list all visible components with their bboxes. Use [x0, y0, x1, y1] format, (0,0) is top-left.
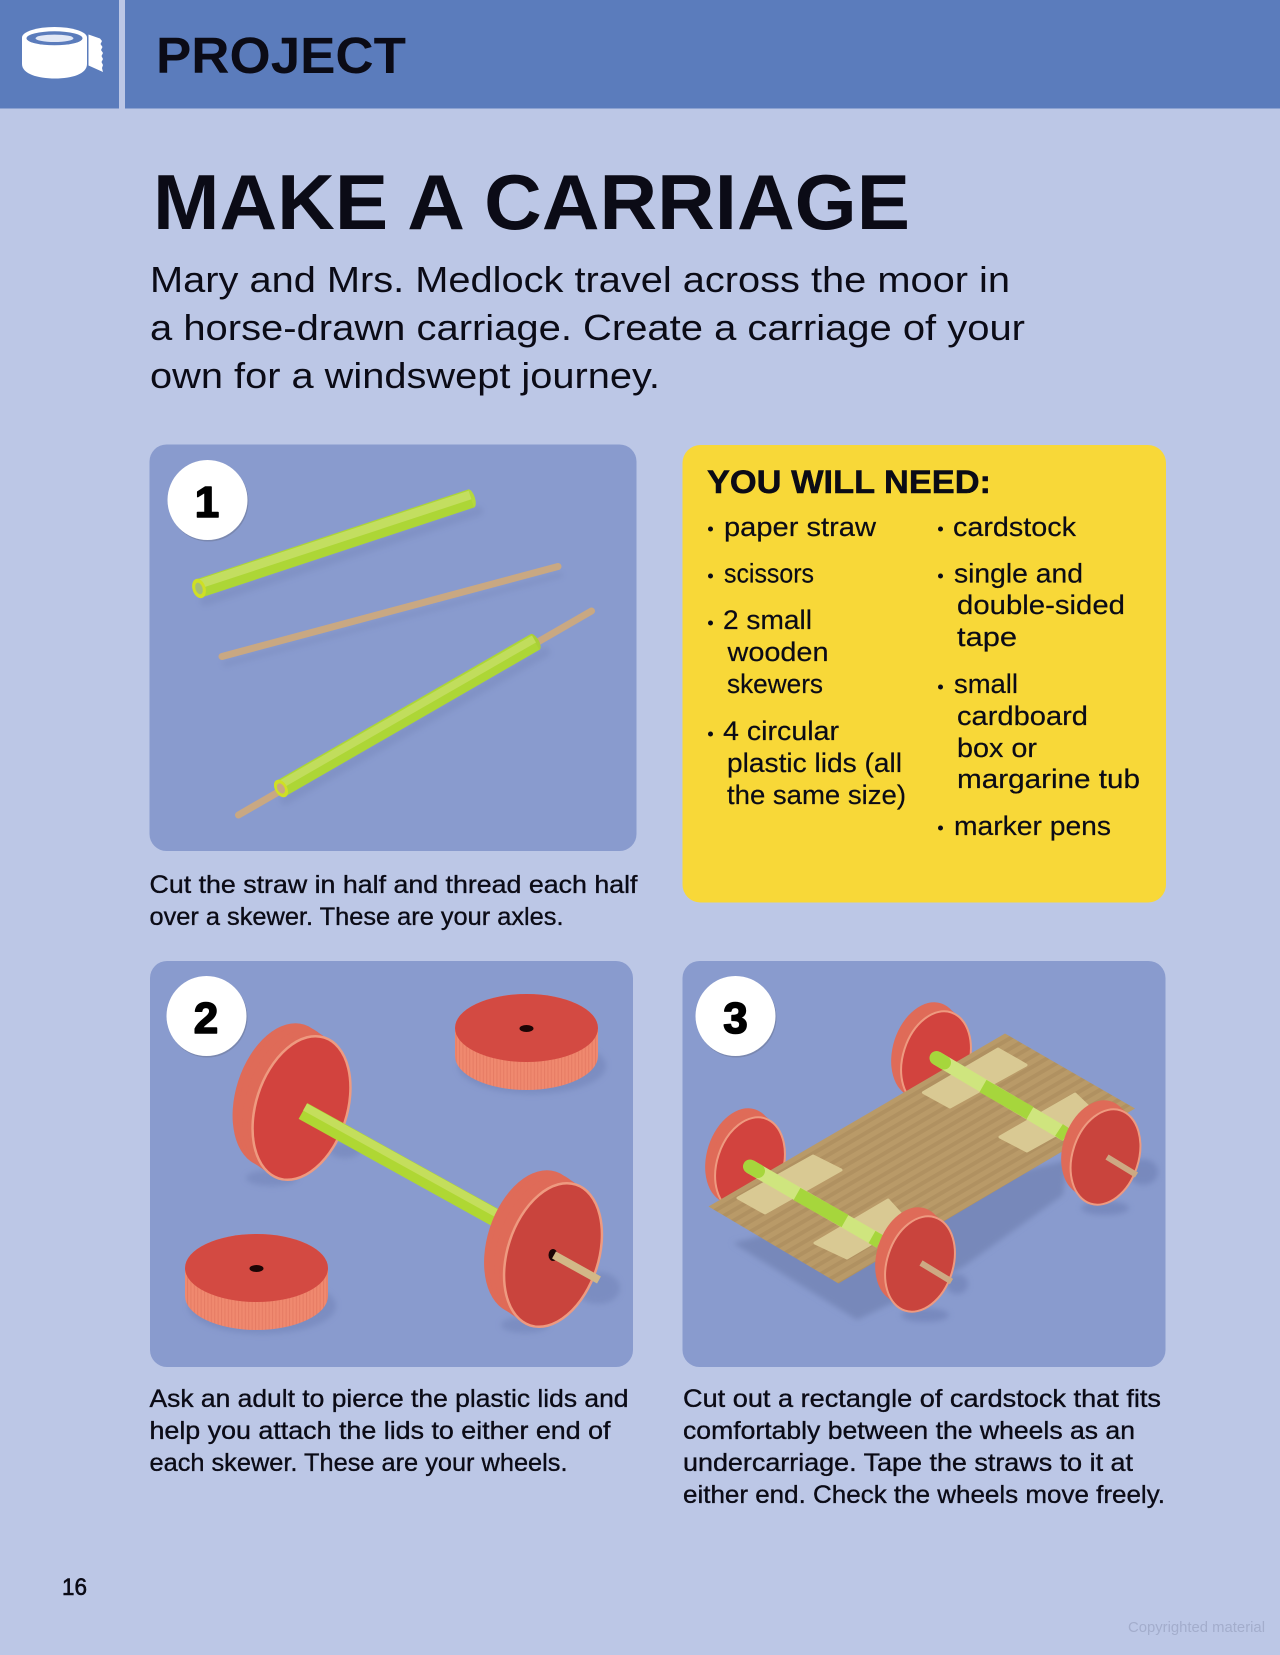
panel: step 1 — [150, 444, 636, 851]
illustration: tape pieces — [738, 1049, 1095, 1258]
caption: step 3: Cut out a rectangle of cardstock that fits — [683, 1385, 1161, 1413]
illustration: far back wheel — [879, 993, 983, 1116]
list: left column: 4 circular — [723, 716, 839, 746]
illustration: right wheel — [1049, 1091, 1152, 1214]
number badge 2 — [166, 976, 248, 1058]
heading: you will need: YOU WILL NEED: — [707, 464, 991, 500]
list: right column: cardboard — [957, 701, 1088, 731]
illustration: far left wheel — [693, 1099, 797, 1222]
list: left column: scissors — [724, 558, 814, 588]
list: right column: margarine tub — [957, 764, 1140, 794]
panel: you will need — [682, 445, 1166, 902]
icon: tape roll — [22, 27, 103, 78]
list: left column — [708, 512, 906, 810]
caption: step 1 — [150, 871, 638, 931]
intro paragraph: Mary and Mrs. Medlock travel across the moor in — [150, 259, 1010, 300]
list: right column: single and — [954, 558, 1083, 588]
number badge 1 — [168, 460, 248, 542]
list: left column: plastic lids (all — [727, 748, 902, 778]
list: right column — [938, 512, 1140, 841]
header band — [0, 0, 1280, 108]
list: right column: small — [954, 669, 1018, 699]
title: MAKE A CARRIAGE — [153, 158, 910, 246]
list: right column: box or — [957, 733, 1037, 763]
illustration: shadows — [205, 511, 560, 800]
illustration: front axle straw — [750, 1166, 880, 1242]
panel: step 2 — [150, 961, 633, 1367]
illustration: flat lid top right — [455, 994, 598, 1090]
caption: step 2: help you attach the lids to either end of — [150, 1417, 611, 1445]
intro paragraph — [150, 259, 1025, 396]
illustration: left wheel — [215, 1011, 368, 1192]
number badge 2: 2 — [194, 994, 218, 1043]
panel: step 3 — [682, 961, 1166, 1367]
list: left column: the same size) — [727, 780, 906, 810]
list: left column: skewers — [727, 669, 823, 699]
intro paragraph: a horse-drawn carriage. Create a carriage of your — [150, 307, 1025, 348]
list: left column: 2 small — [723, 605, 812, 635]
caption: step 2 — [150, 1385, 628, 1477]
list: left column: wooden — [726, 637, 828, 667]
illustration: shadows — [188, 1038, 620, 1334]
list: right column: double-sided — [957, 590, 1125, 620]
number badge 3 — [696, 976, 776, 1058]
caption: step 3 — [683, 1385, 1165, 1509]
illustration: right wheel — [467, 1158, 619, 1339]
illustration: loose skewer — [222, 566, 558, 656]
header label: PROJECT — [156, 27, 406, 84]
list: right column: tape — [957, 622, 1017, 652]
illustration: flat lid bottom left — [185, 1234, 328, 1330]
copyright note: Copyrighted material — [1128, 1619, 1265, 1636]
number badge 3: 3 — [723, 994, 748, 1043]
caption: step 2: each skewer. These are your wheels. — [150, 1449, 568, 1477]
caption: step 3: comfortably between the wheels as an — [683, 1417, 1135, 1445]
list: right column: marker pens — [954, 811, 1111, 841]
number badge 1: 1 — [195, 478, 219, 527]
caption: step 1: Cut the straw in half and thread each half — [150, 871, 638, 899]
caption: step 3: undercarriage. Tape the straws to it at — [683, 1449, 1133, 1477]
illustration: axle straw — [303, 1107, 498, 1218]
caption: step 1: over a skewer. These are your axles. — [150, 903, 564, 931]
intro paragraph: own for a windswept journey. — [150, 355, 660, 396]
illustration: ground shadows — [733, 1159, 1158, 1322]
list: right column: cardstock — [953, 512, 1077, 542]
illustration: cardstock board — [708, 1034, 1135, 1284]
illustration: loose straw — [190, 488, 478, 600]
list: left column: paper straw — [724, 512, 877, 542]
illustration: front wheel — [863, 1198, 967, 1321]
illustration: skewer threaded through straw — [238, 611, 592, 815]
page number: 16 — [62, 1574, 87, 1601]
caption: step 2: Ask an adult to pierce the plastic lids and — [150, 1385, 628, 1413]
caption: step 3: either end. Check the wheels move freely. — [683, 1481, 1165, 1509]
illustration: back axle straw — [936, 1058, 1066, 1135]
